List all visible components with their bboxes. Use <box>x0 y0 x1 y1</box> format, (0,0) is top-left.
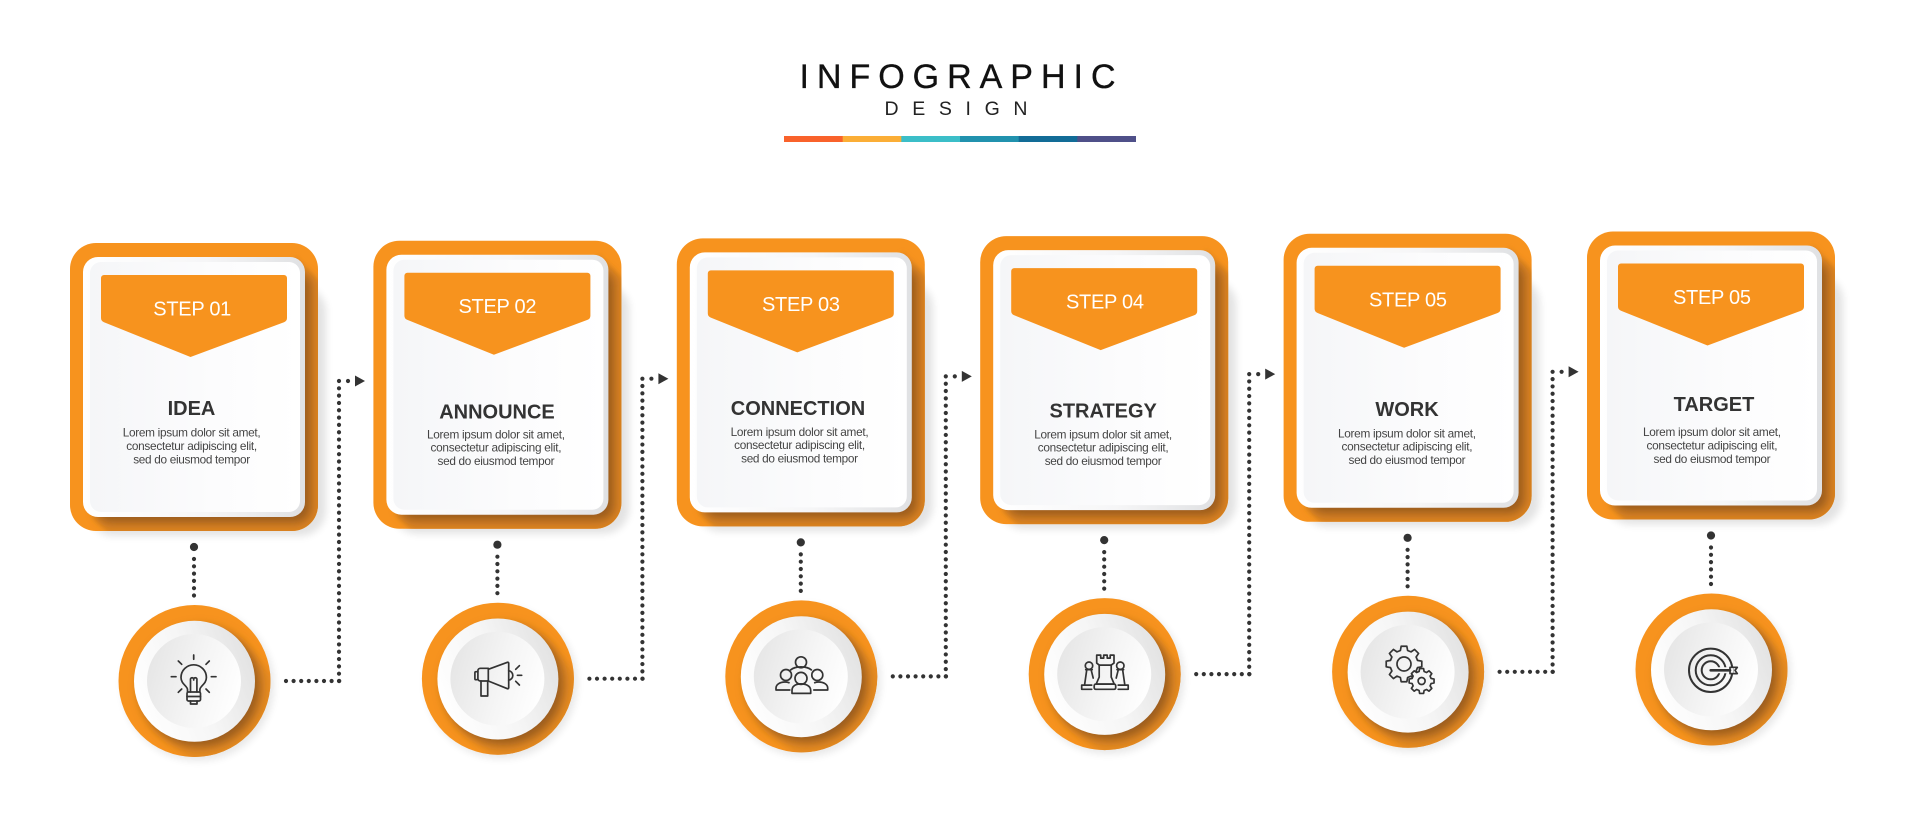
dotted link: step 05 <box>1404 534 1412 587</box>
panel: step 05 work <box>1284 234 1554 536</box>
text block: sed do eiusmod tempor <box>1348 453 1466 467</box>
connector: step 1 to step 2 <box>286 376 365 681</box>
icon: chess pieces <box>1082 655 1128 689</box>
heading: IDEA <box>168 398 215 420</box>
connector: step 2 to step 3 <box>589 373 668 679</box>
text block: Lorem ipsum dolor sit amet, <box>1034 428 1172 442</box>
text block: consectetur adipiscing elit, <box>1038 440 1169 454</box>
step label: STEP 05 <box>1369 289 1447 311</box>
text block: consectetur adipiscing elit, <box>430 440 562 454</box>
text block: sed do eiusmod tempor <box>438 454 555 468</box>
text block <box>731 425 869 466</box>
text block <box>427 428 565 468</box>
step label: STEP 01 <box>153 298 231 320</box>
text block: consectetur adipiscing elit, <box>126 439 257 453</box>
connector: step 5 to step 6 <box>1500 366 1579 672</box>
heading: WORK <box>1375 399 1439 421</box>
dotted link: step 06 <box>1707 531 1715 584</box>
icon: light bulb <box>171 655 216 704</box>
heading: INFOGRAPHIC: INFOGRAPHIC <box>800 58 1116 96</box>
circle: step 04 <box>1029 598 1205 774</box>
text block: sed do eiusmod tempor <box>741 452 858 466</box>
heading: CONNECTION <box>731 398 865 420</box>
heading: STRATEGY <box>1049 400 1158 422</box>
panel: step 06 target <box>1587 232 1857 534</box>
text block: Lorem ipsum dolor sit amet, <box>731 425 869 439</box>
text block: consectetur adipiscing elit, <box>734 438 865 452</box>
heading: TARGET <box>1674 394 1754 416</box>
connector: step 4 to step 5 <box>1196 369 1275 674</box>
text block <box>1338 426 1476 467</box>
panel: step 03 connection <box>677 238 947 540</box>
text block: Lorem ipsum dolor sit amet, <box>1643 425 1781 439</box>
icon: target with arrow <box>1689 649 1737 692</box>
heading: ANNOUNCE <box>439 402 555 424</box>
panel: step 01 idea <box>70 243 340 545</box>
circle: step 06 <box>1636 594 1812 770</box>
connector: step 3 to step 4 <box>893 371 972 676</box>
text block: consectetur adipiscing elit, <box>1646 438 1778 452</box>
circle: step 03 <box>725 600 902 777</box>
text block <box>1643 425 1781 466</box>
step label: STEP 03 <box>762 294 840 316</box>
text block <box>1034 428 1172 468</box>
circle: step 02 <box>422 603 599 779</box>
colour bar <box>784 136 1136 142</box>
panel: step 04 strategy <box>980 236 1250 538</box>
text block: Lorem ipsum dolor sit amet, <box>123 426 261 440</box>
circle: step 05 <box>1332 596 1509 772</box>
step label: STEP 02 <box>458 296 536 318</box>
text block <box>123 426 261 466</box>
text block: sed do eiusmod tempor <box>1045 454 1162 468</box>
dotted link: step 04 <box>1100 536 1108 589</box>
circle: step 01 <box>118 605 295 781</box>
icon: megaphone <box>475 662 522 696</box>
step label: STEP 05 <box>1673 287 1751 309</box>
text block: consectetur adipiscing elit, <box>1342 440 1472 454</box>
dotted link: step 02 <box>493 541 502 594</box>
text block: Lorem ipsum dolor sit amet, <box>1338 426 1476 440</box>
title <box>784 58 1136 142</box>
dotted link: step 03 <box>797 538 805 591</box>
panel: step 02 announce <box>373 241 643 543</box>
subheading: DESIGN: DESIGN <box>884 98 1028 120</box>
text block: sed do eiusmod tempor <box>133 452 250 466</box>
text block: sed do eiusmod tempor <box>1654 452 1771 466</box>
dotted link: step 01 <box>190 543 198 596</box>
text block: Lorem ipsum dolor sit amet, <box>427 428 565 442</box>
icon: gears <box>1386 646 1434 693</box>
step label: STEP 04 <box>1066 292 1144 314</box>
icon: people group <box>776 657 828 693</box>
